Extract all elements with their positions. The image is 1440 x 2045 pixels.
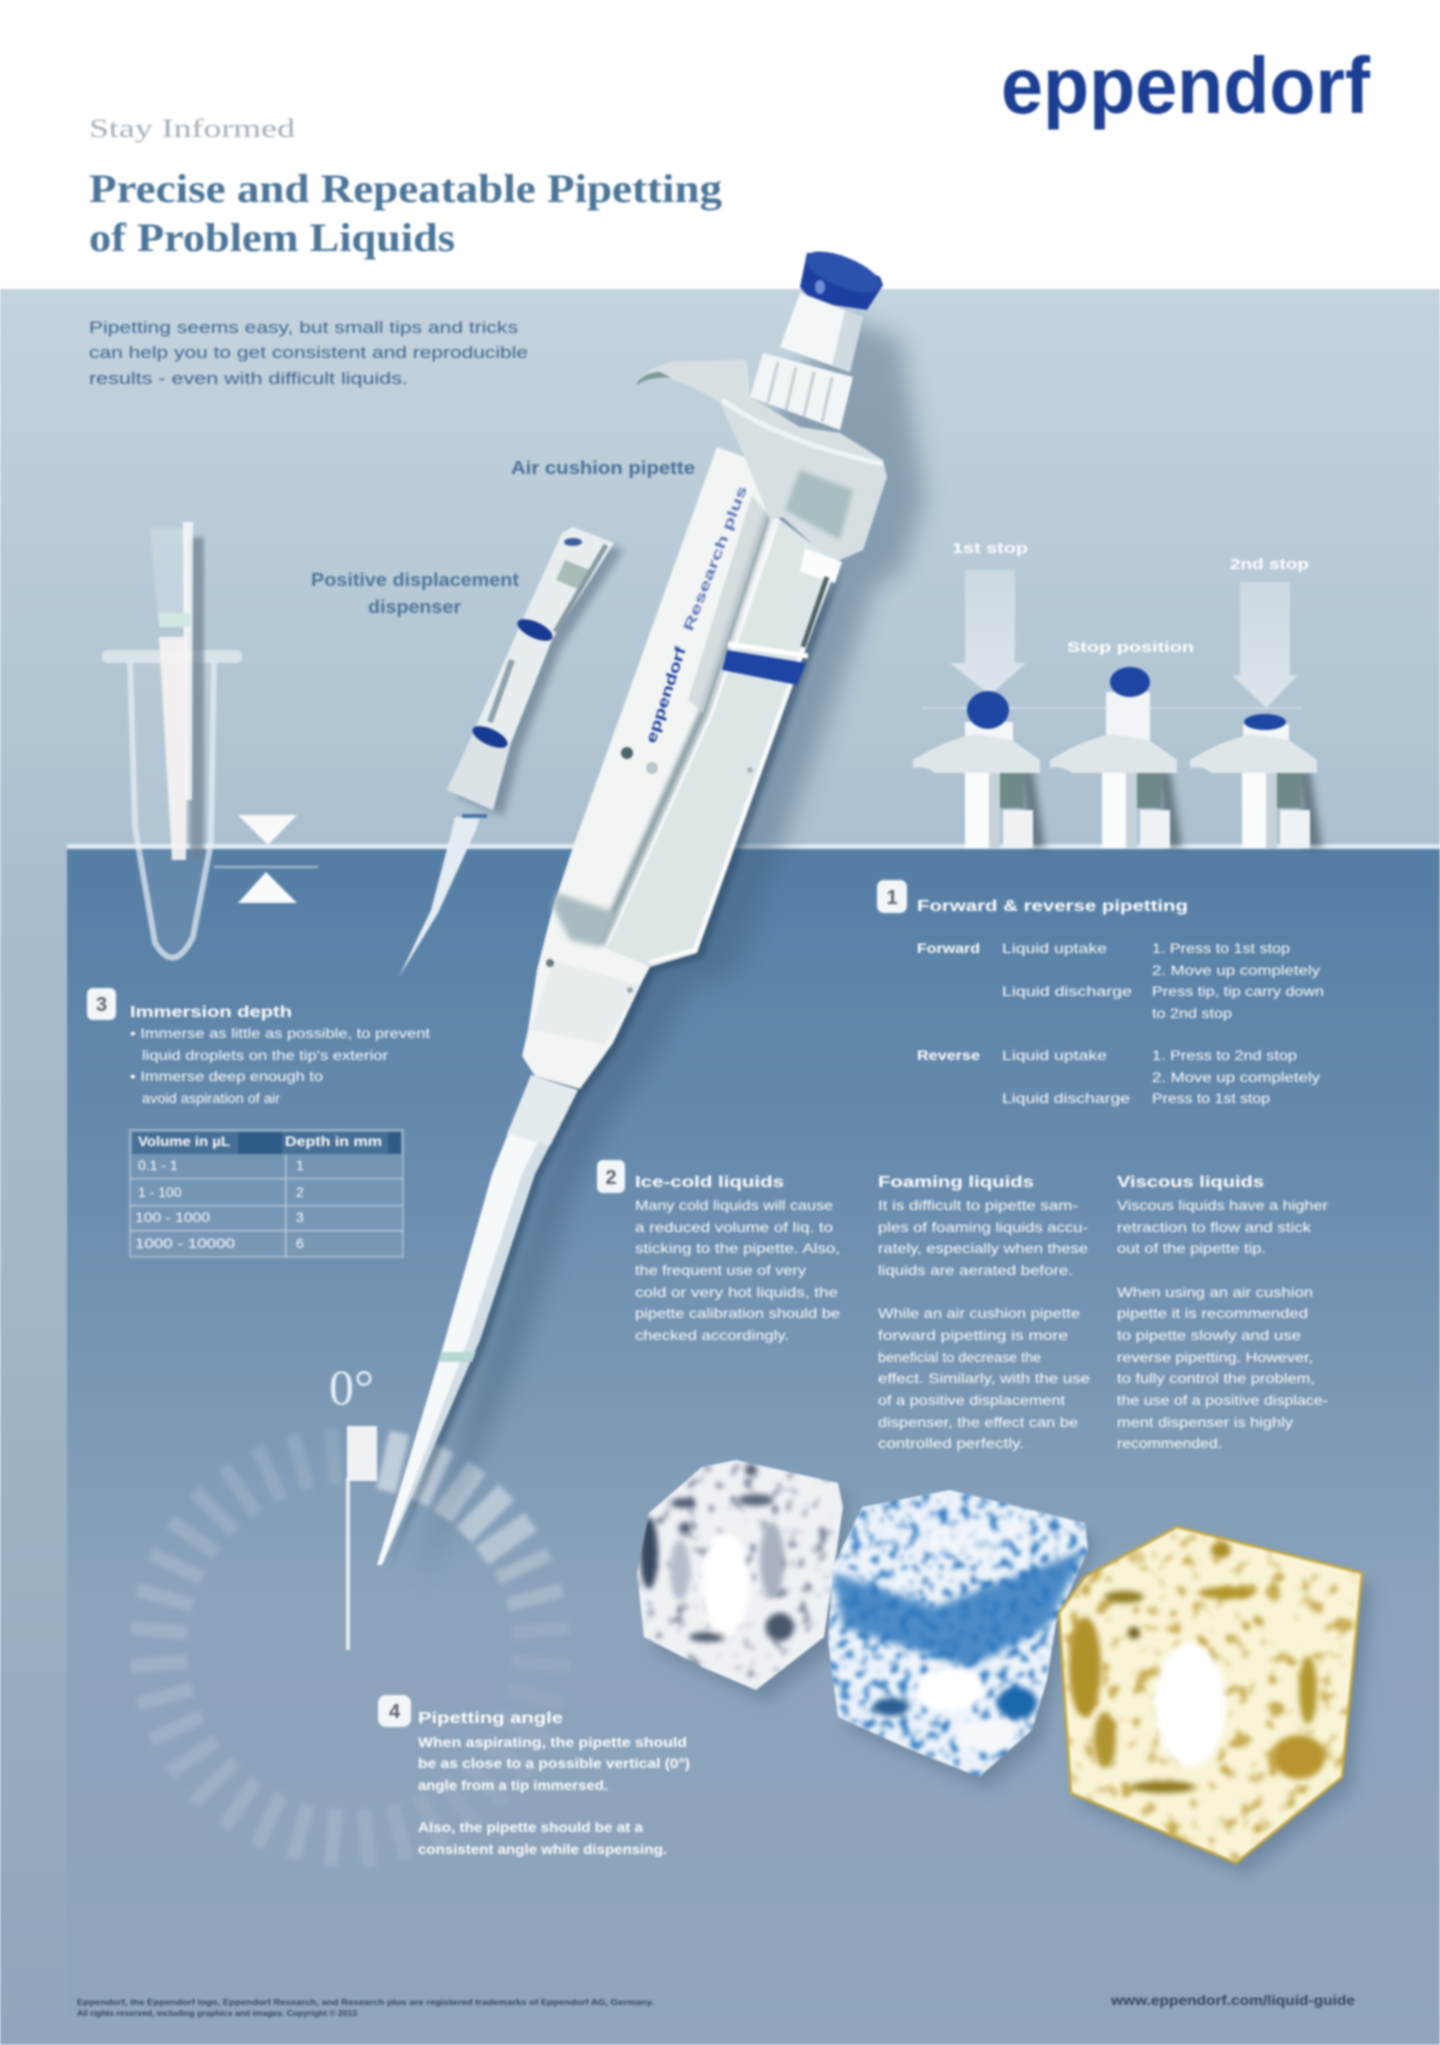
intro text: can help you to get consistent and reproducible [89, 343, 528, 362]
column: viscous liquids: pipette it is recommended [1117, 1305, 1308, 1321]
kicker: Stay Informed [89, 114, 295, 143]
angle dial [130, 1426, 570, 1867]
body dots [546, 747, 753, 993]
body text: Also, the pipette should be at a [418, 1819, 643, 1835]
label: positive displacement dispenser [311, 570, 519, 617]
badge: 4 [389, 1701, 401, 1723]
illustration: gold viscous cube [1050, 1520, 1372, 1875]
bullet text: • Immerse deep enough to [130, 1068, 323, 1084]
white clip [800, 548, 842, 583]
arrow: press to 2nd stop [1232, 582, 1298, 708]
left column grey side [688, 495, 768, 713]
reverse rows: Reverse [917, 1047, 980, 1063]
forward rows: to 2nd stop [1152, 1005, 1232, 1021]
immersion depth table: Volume in µL [138, 1133, 230, 1149]
intro text [89, 318, 528, 388]
illustration: pipette at 1st stop [913, 691, 1045, 848]
column: foaming liquids: beneficial to decrease the [878, 1349, 1041, 1365]
badge: 3 [96, 994, 107, 1016]
forward rows [917, 940, 1324, 1021]
panel: immersion depth [87, 988, 430, 1257]
title: Precise and Repeatable Pipetting [89, 166, 722, 211]
dispenser tip [399, 817, 480, 977]
grey gap between columns [600, 513, 768, 943]
badge [87, 988, 116, 1020]
immersion depth table: 1000 - 10000 [135, 1235, 235, 1251]
bullet text [130, 1025, 430, 1106]
panel: pipetting angle [378, 1695, 690, 1857]
dispenser body [447, 527, 614, 810]
title [89, 166, 722, 260]
illustration: air cushion pipette [377, 243, 887, 1570]
label: positive displacement dispenser: Positive displacement [311, 570, 519, 590]
rest inset [785, 470, 853, 540]
column: viscous liquids: recommended. [1117, 1435, 1222, 1451]
badge: 2 [605, 1167, 617, 1189]
column: viscous liquids: When using an air cushion [1117, 1284, 1313, 1300]
edge shadow [388, 568, 843, 1570]
illustration: pipette at rest position [1050, 667, 1182, 848]
immersion depth table: 100 - 1000 [135, 1209, 210, 1225]
reverse rows [917, 1047, 1320, 1106]
label: air cushion pipette: Air cushion pipette [511, 458, 695, 478]
column: ice-cold liquids: pipette calibration should be [635, 1305, 840, 1321]
immersion depth indicator triangles [214, 815, 318, 903]
column: viscous liquids: the use of a positive displace- [1117, 1392, 1328, 1408]
website: www.eppendorf.com/liquid-guide [1110, 1992, 1355, 2008]
blue band [728, 644, 808, 656]
column: viscous liquids: out of the pipette tip. [1117, 1240, 1266, 1256]
title: of Problem Liquids [89, 215, 455, 260]
footnote: Eppendorf, the Eppendorf logo, Eppendorf Research, and Research plus are registered trademarks of Eppendorf AG, Germany. [77, 1998, 654, 2007]
grey finger rest [637, 360, 887, 563]
knurled collar [750, 353, 853, 430]
lower grip shading [553, 893, 617, 947]
column: ice-cold liquids: Many cold liquids will cause [635, 1197, 833, 1213]
tip and shaft [377, 1075, 578, 1565]
badge [378, 1695, 411, 1727]
bullet text: avoid aspiration of air [142, 1090, 280, 1106]
reverse rows: 2. Move up completely [1152, 1069, 1320, 1085]
dark slot [803, 577, 827, 647]
column: foaming liquids: It is difficult to pipette sam- [878, 1197, 1078, 1213]
right body column [603, 520, 837, 967]
intro text: results - even with difficult liquids. [89, 369, 408, 388]
forward rows: Press tip, tip carry down [1152, 983, 1324, 999]
footnote [77, 1998, 654, 2018]
reverse rows: Liquid uptake [1002, 1047, 1107, 1063]
immersion depth table: 1 - 100 [138, 1184, 182, 1200]
panel: forward and reverse pipetting [877, 880, 1324, 1106]
column: viscous liquids: Viscous liquids [1117, 1174, 1264, 1191]
footnote: All rights reserved, including graphics and images. Copyright © 2013 [77, 2009, 358, 2018]
model name: eppendorf [643, 644, 690, 745]
angle label: 0° [329, 1359, 374, 1415]
column: foaming liquids: ples of foaming liquids accu- [878, 1219, 1088, 1235]
heading: Forward & reverse pipetting [917, 898, 1188, 915]
model name [643, 483, 750, 745]
body text: consistent angle while dispensing. [418, 1841, 667, 1857]
column: viscous liquids: ment dispenser is highly [1117, 1414, 1293, 1430]
body [522, 447, 837, 1089]
finger hook tip [637, 372, 672, 385]
column: foaming liquids: rately, especially when these [878, 1240, 1088, 1256]
column: ice-cold liquids: sticking to the pipette. Also, [635, 1240, 840, 1256]
body text: When aspirating, the pipette should [418, 1734, 687, 1750]
illustration: positive displacement dispenser [399, 527, 624, 977]
column: foaming liquids [878, 1174, 1090, 1451]
column: viscous liquids: to pipette slowly and use [1117, 1327, 1301, 1343]
column: ice-cold liquids: Ice-cold liquids [635, 1174, 784, 1191]
column: ice-cold liquids: checked accordingly. [635, 1327, 789, 1343]
immersion depth table: 0.1 - 1 [138, 1157, 178, 1173]
column: foaming liquids: While an air cushion pipette [878, 1305, 1080, 1321]
illustration: pipette at 2nd stop [1190, 714, 1322, 848]
label: 1st stop: 1st stop [952, 540, 1028, 557]
column: viscous liquids: retraction to flow and stick [1117, 1219, 1312, 1235]
illustration: clear ice cube [630, 1455, 850, 1702]
liquid surface line [67, 844, 1440, 849]
column: ice-cold liquids: a reduced volume of liq. to [635, 1219, 833, 1235]
body text: be as close to a possible vertical (0°) [418, 1755, 690, 1771]
column: foaming liquids: of a positive displacement [878, 1392, 1065, 1408]
column: viscous liquids: to fully control the problem, [1117, 1370, 1315, 1386]
body text [418, 1734, 690, 1857]
column: foaming liquids: liquids are aerated before. [878, 1262, 1073, 1278]
badge [597, 1160, 625, 1193]
stop position guide line [922, 707, 1302, 709]
immersion depth table [130, 1130, 403, 1257]
heading: Immersion depth [130, 1004, 292, 1021]
column: ice-cold liquids: the frequent use of very [635, 1262, 806, 1278]
column: viscous liquids: Viscous liquids have a higher [1117, 1197, 1328, 1213]
forward rows: 2. Move up completely [1152, 962, 1320, 978]
reverse rows: Liquid discharge [1002, 1090, 1130, 1106]
panel: liquid area [67, 849, 1440, 2045]
immersion depth table: 2 [296, 1184, 304, 1200]
model name: Research plus [680, 483, 750, 633]
badge [877, 880, 907, 913]
bullet text: • Immerse as little as possible, to prevent [130, 1025, 430, 1041]
reverse rows: 1. Press to 2nd stop [1152, 1047, 1297, 1063]
column: foaming liquids: effect. Similarly, with the use [878, 1370, 1090, 1386]
logo: eppendorf [1001, 41, 1370, 130]
reverse rows: Press to 1st stop [1152, 1090, 1270, 1106]
column: foaming liquids: Foaming liquids [878, 1174, 1034, 1191]
panel: problem liquids [597, 1160, 1328, 1451]
blue push button [800, 253, 883, 310]
immersion depth table: 6 [296, 1235, 304, 1251]
column: ice-cold liquids: cold or very hot liquids, the [635, 1284, 838, 1300]
forward rows: Liquid discharge [1002, 983, 1132, 999]
intro text: Pipetting seems easy, but small tips and tricks [89, 318, 518, 337]
heading: Pipetting angle [418, 1710, 563, 1727]
column: ice-cold liquids [635, 1174, 840, 1343]
column: viscous liquids: reverse pipetting. However, [1117, 1349, 1313, 1365]
column: foaming liquids: controlled perfectly. [878, 1435, 1024, 1451]
label: positive displacement dispenser: dispenser [368, 597, 461, 617]
white header background [0, 0, 1440, 289]
neck [780, 293, 863, 372]
column: viscous liquids [1117, 1174, 1328, 1451]
forward rows: 1. Press to 1st stop [1152, 940, 1290, 956]
illustration: blue foaming cube [825, 1485, 1095, 1789]
label: 2nd stop: 2nd stop [1230, 556, 1309, 573]
immersion depth table: Depth in mm [285, 1133, 382, 1149]
immersion depth table: 3 [296, 1209, 304, 1225]
body text: angle from a tip immersed. [418, 1777, 608, 1793]
pipette shadow [420, 315, 925, 1587]
immersion depth table: 1 [296, 1157, 304, 1173]
label: stop position: Stop position [1067, 639, 1194, 656]
forward rows: Forward [917, 940, 980, 956]
forward rows: Liquid uptake [1002, 940, 1107, 956]
illustration: tube with tip [102, 522, 242, 958]
arrow: press to 1st stop [950, 570, 1026, 695]
badge: 1 [886, 887, 898, 909]
column: foaming liquids: forward pipetting is more [878, 1327, 1068, 1343]
bullet text: liquid droplets on the tip's exterior [142, 1047, 388, 1063]
column: foaming liquids: dispenser, the effect can be [878, 1414, 1078, 1430]
